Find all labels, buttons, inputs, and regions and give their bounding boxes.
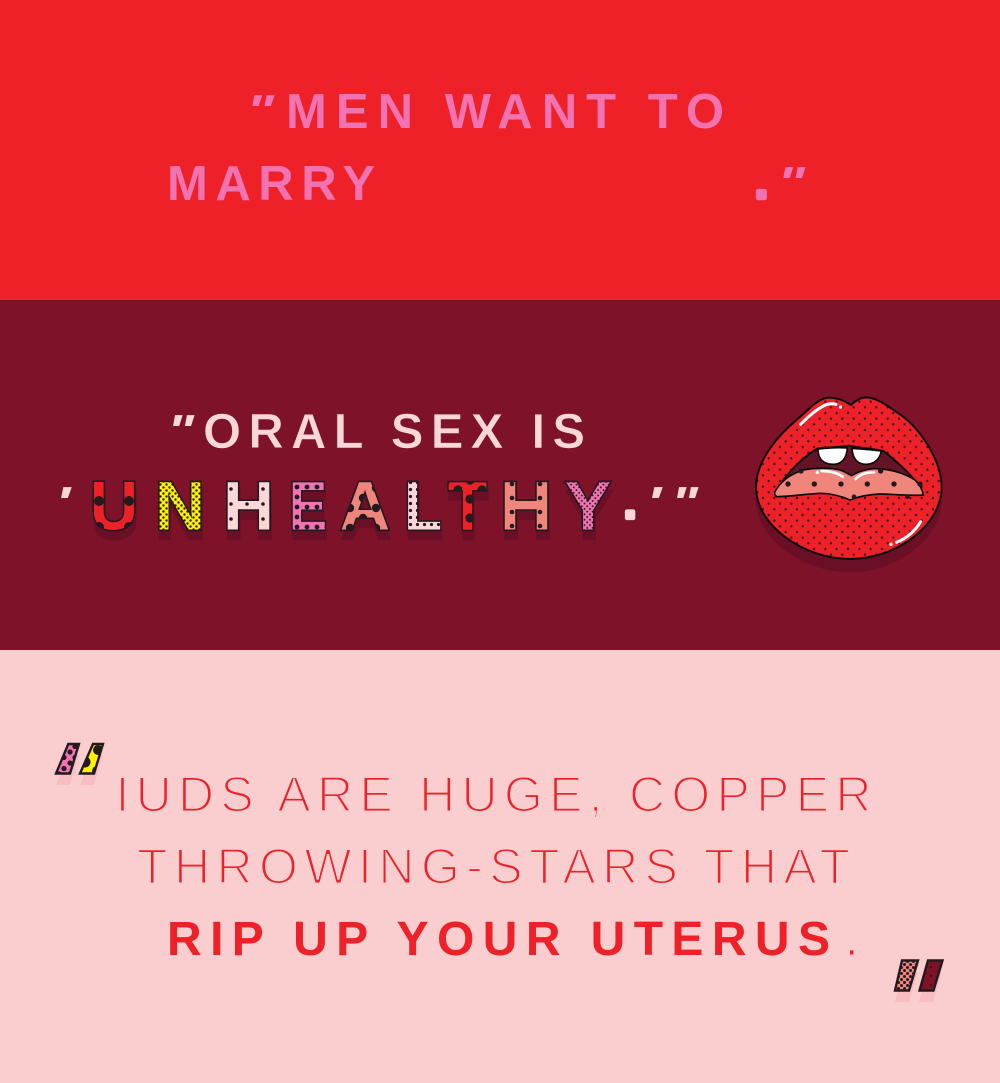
heading: men want to marry: MARRY: [167, 157, 375, 211]
patterned word: unhealthy: [90, 468, 611, 544]
panel: dark red myth about oral sex: [0, 300, 1000, 650]
patterned word: unhealthy: Y: [565, 468, 611, 544]
panel: red myth about marriage: [0, 0, 1000, 300]
quote text: IUDS ARE HUGE, COPPER: [116, 766, 872, 822]
quote text: THROWING-STARS THAT: [137, 838, 850, 894]
patterned word: unhealthy: H: [500, 468, 552, 544]
heading: men want to marry: ": [777, 158, 807, 207]
quote text emphasis: RIP UP YOUR UTERUS: [167, 913, 830, 966]
quote text emphasis: .: [845, 913, 858, 966]
patterned word: unhealthy: E: [289, 468, 327, 544]
heading: oral sex is: ORAL SEX IS: [203, 405, 585, 459]
heading: oral sex is: ": [167, 406, 195, 455]
heading: men want to marry: .: [755, 156, 768, 208]
quote text: [116, 766, 872, 894]
closing punctuation: .: [624, 479, 636, 528]
closing punctuation: ": [671, 478, 699, 527]
heading: men want to marry: ": [246, 86, 276, 135]
opening single quote: ': [55, 478, 72, 527]
tongue dots: [785, 468, 923, 499]
panel: pink myth about IUDs: [0, 650, 1000, 1083]
teeth: [818, 448, 847, 464]
patterned word: unhealthy: N: [155, 468, 205, 544]
closing quote mark: [895, 960, 942, 1002]
heading: men want to marry: MEN WANT TO: [286, 85, 724, 139]
patterned word: unhealthy: U: [90, 468, 138, 544]
shine highlights: [801, 404, 921, 542]
tongue: [775, 468, 923, 500]
icon: pop-art lips: [756, 397, 942, 572]
patterned word: unhealthy: A: [340, 468, 390, 544]
opening quote mark: [56, 744, 103, 785]
closing punctuation: ': [646, 478, 663, 527]
mouth interior: [783, 446, 918, 485]
heading: men want to marry: [167, 85, 807, 211]
patterned word: unhealthy: H: [223, 468, 274, 544]
closing punctuation: [624, 478, 699, 528]
patterned word: unhealthy: L: [404, 468, 442, 544]
patterned word: unhealthy: T: [448, 468, 487, 544]
